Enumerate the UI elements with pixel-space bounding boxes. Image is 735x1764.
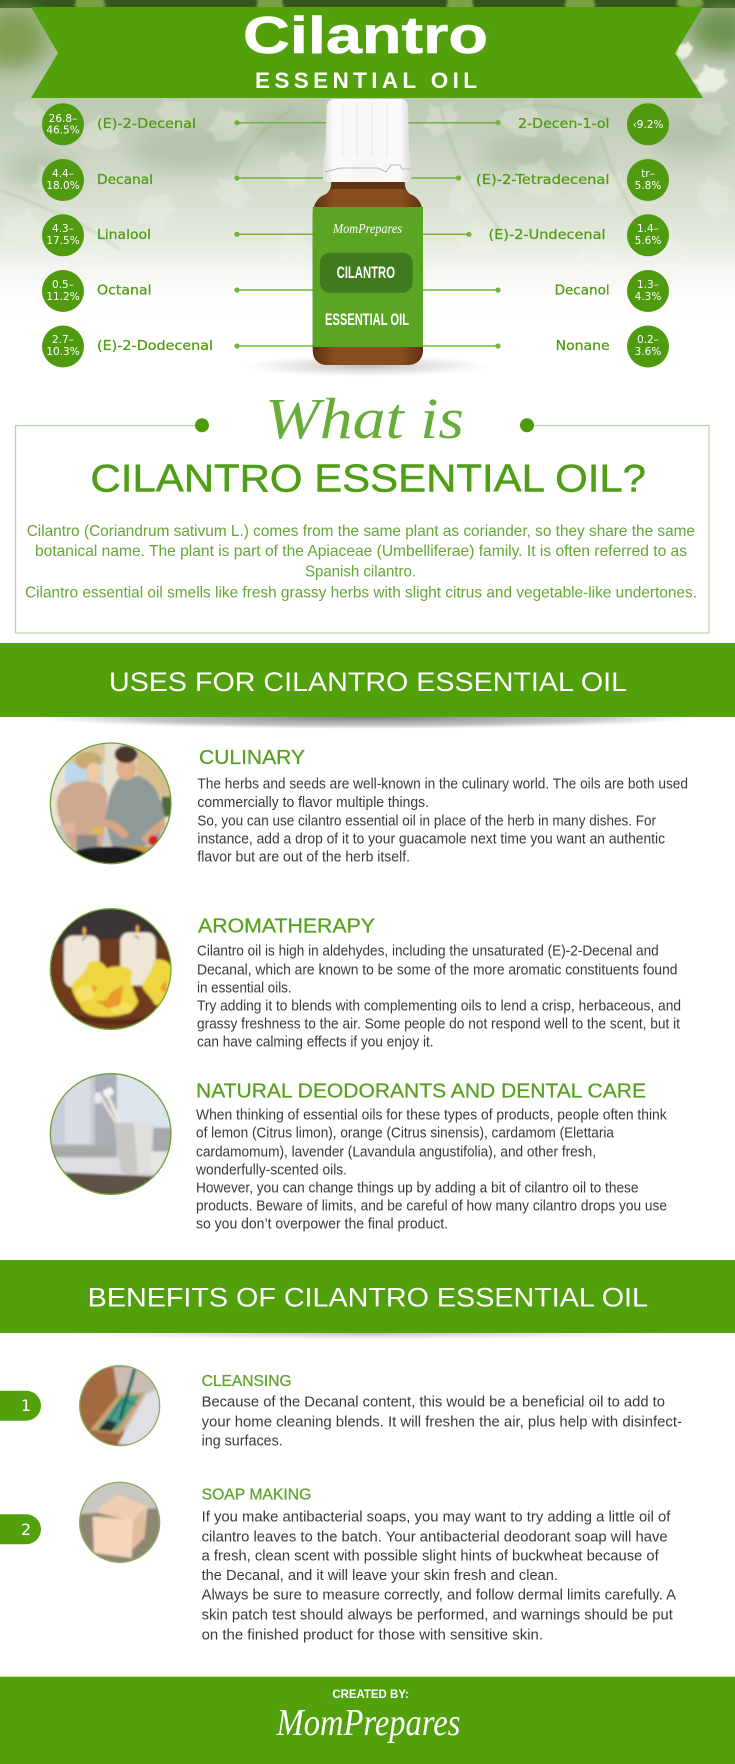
band: uses: USES FOR CILANTRO ESSENTIAL OIL xyxy=(109,667,627,697)
text block: soap making: the Decanal, and it will leave your skin fresh and clean. xyxy=(202,1567,558,1584)
text block: culinary: CULINARY xyxy=(199,747,305,769)
text block: culinary: instance, add a drop of it to your guacamole next time you want an authentic xyxy=(197,831,665,847)
text block: culinary: commercially to flavor multiple things. xyxy=(197,795,429,811)
left compound list: 2.7– xyxy=(52,334,74,346)
left compound list: 18.0% xyxy=(46,180,80,192)
text block: culinary: So, you can use cilantro essential oil in place of the herb in many dishes. For xyxy=(197,814,656,830)
banner ribbon xyxy=(31,7,703,98)
number tab 1 xyxy=(0,1391,41,1421)
left compound list: Octanal xyxy=(97,282,152,298)
text block: deodorants and dental care: When thinking of essential oils for these types of products, people often think xyxy=(196,1107,667,1123)
text block: culinary: flavor but are out of the herb itself. xyxy=(197,849,410,865)
description paragraph: Spanish cilantro. xyxy=(305,564,416,581)
subtitle: Essential Oil: ESSENTIAL OIL xyxy=(255,68,477,93)
left compound list: Linalool xyxy=(97,227,151,243)
description paragraph: Cilantro essential oil smells like fresh grassy herbs with slight citrus and vegetable-like undertones. xyxy=(25,584,697,601)
photo: mop on wooden floor xyxy=(79,1365,160,1446)
text block: cleansing: Because of the Decanal content, this would be a beneficial oil to add to xyxy=(202,1393,665,1410)
text block: aromatherapy: grassy freshness to the air. Some people do not respond well to the scent, but it xyxy=(197,1017,680,1033)
text block: aromatherapy: AROMATHERAPY xyxy=(198,916,375,938)
connector lines xyxy=(234,120,501,349)
photo: soap bars xyxy=(79,1482,160,1563)
main heading: CILANTRO ESSENTIAL OIL? xyxy=(90,458,646,501)
text block: deodorants and dental care: so you don’t overpower the final product. xyxy=(196,1216,448,1232)
text block: soap making xyxy=(202,1486,676,1643)
left compound list: 46.5% xyxy=(46,124,80,136)
left compound list: 4.3– xyxy=(52,223,74,235)
text block: aromatherapy: can have calming effects if you enjoy it. xyxy=(197,1035,434,1051)
photo: toothbrushes in cup xyxy=(50,1073,172,1195)
right compound list: Nonane xyxy=(556,338,610,354)
right compound list: 4.3% xyxy=(635,291,661,303)
text block: soap making: If you make antibacterial soaps, you may want to try adding a little oil of xyxy=(202,1509,671,1526)
text block: soap making: a fresh, clean scent with possible slight hints of buckwheat because of xyxy=(202,1548,660,1565)
text block: deodorants and dental care xyxy=(195,1081,667,1232)
text block: soap making: skin patch test should always be performed, and warnings should be put xyxy=(202,1606,674,1623)
band: uses xyxy=(0,643,735,729)
text block: deodorants and dental care: of lemon (Citrus limon), orange (Citrus sinensis), cardamom (Elettaria xyxy=(196,1125,615,1141)
left compound list: (E)-2-Decenal xyxy=(97,116,196,132)
right compound list xyxy=(476,103,669,368)
footer xyxy=(0,1677,735,1764)
text block: deodorants and dental care: However, you can change things up by adding a bit of cilantro oil to these xyxy=(196,1180,638,1196)
left compound list: Decanal xyxy=(97,172,153,188)
left compound list: (E)-2-Dodecenal xyxy=(97,338,213,354)
text block: soap making: cilantro leaves to the batch. Your antibacterial deodorant soap will have xyxy=(202,1529,668,1546)
text block: aromatherapy: Cilantro oil is high in aldehydes, including the unsaturated (E)-2-Decenal and xyxy=(197,943,659,959)
description paragraph: Cilantro (Coriandrum sativum L.) comes from the same plant as coriander, so they share the same xyxy=(27,523,695,540)
number tab 2 xyxy=(0,1514,41,1544)
background: cilantro leaves photo xyxy=(0,0,735,375)
right compound list: tr– xyxy=(641,168,655,180)
bottle label type: ESSENTIAL OIL xyxy=(325,310,409,329)
bottle label name: CILANTRO xyxy=(337,263,395,282)
bottle xyxy=(242,99,492,377)
text block: deodorants and dental care: cardamomum), lavender (Lavandula angustifolia), and other fresh, xyxy=(196,1144,596,1160)
text block: soap making: Always be sure to measure correctly, and follow dermal limits carefully. A xyxy=(202,1586,676,1603)
text block: deodorants and dental care: wonderfully-scented oils. xyxy=(195,1162,347,1178)
text block: deodorants and dental care: products. Beware of limits, and be careful of how many cilantro drops you use xyxy=(196,1198,667,1214)
text block: aromatherapy: in essential oils. xyxy=(197,981,292,997)
text block: soap making: on the finished product for those with sensitive skin. xyxy=(202,1626,543,1643)
left compound list: 26.8– xyxy=(49,113,77,125)
band: benefits xyxy=(0,1260,735,1340)
text block: culinary: The herbs and seeds are well-known in the culinary world. The oils are both used xyxy=(197,776,688,792)
number tab 2: 2 xyxy=(21,1520,31,1539)
text block: aromatherapy: Try adding it to blends with complementing oils to lend a crisp, herbaceous, and xyxy=(197,999,681,1015)
text block: cleansing: CLEANSING xyxy=(202,1373,292,1390)
left compound list: 10.3% xyxy=(46,346,80,358)
right compound list: 5.8% xyxy=(635,180,661,192)
right compound list: 1.4– xyxy=(637,223,659,235)
title: Cilantro: Cilantro xyxy=(243,7,488,65)
footer: created by: CREATED BY: xyxy=(332,1687,409,1701)
description paragraph xyxy=(25,523,697,601)
left compound list: 17.5% xyxy=(46,235,80,247)
left compound list: 11.2% xyxy=(46,291,80,303)
photo: couple cooking xyxy=(50,742,172,864)
text block: aromatherapy xyxy=(197,916,681,1051)
description paragraph: botanical name. The plant is part of the Apiaceae (Umbelliferae) family. It is often referred to as xyxy=(35,543,687,560)
left compound list: 0.5– xyxy=(52,279,74,291)
script heading: What is xyxy=(265,386,464,451)
text block: cleansing: ing surfaces. xyxy=(202,1433,283,1450)
right compound list: 1.3– xyxy=(637,279,659,291)
text block: culinary xyxy=(197,747,688,865)
right compound list: 5.6% xyxy=(635,235,661,247)
band: benefits: BENEFITS OF CILANTRO ESSENTIAL OIL xyxy=(88,1283,648,1313)
text block: cleansing xyxy=(202,1373,682,1450)
panel: what is xyxy=(16,386,709,633)
right compound list: 0.2– xyxy=(637,334,659,346)
text block: aromatherapy: Decanal, which are known to be some of the more aromatic constituents found xyxy=(197,962,678,978)
right compound list: 2-Decen-1-ol xyxy=(518,116,610,132)
right compound list: Decanol xyxy=(555,282,610,298)
text block: soap making: SOAP MAKING xyxy=(202,1486,311,1503)
text block: deodorants and dental care: NATURAL DEODORANTS AND DENTAL CARE xyxy=(196,1081,646,1103)
top edge of leaves xyxy=(0,0,735,8)
text block: cleansing: your home cleaning blends. It will freshen the air, plus help with disinfect- xyxy=(202,1413,682,1430)
right compound list: (E)-2-Tetradecenal xyxy=(476,172,610,188)
photo: candles and flowers xyxy=(50,908,172,1030)
right compound list: 3.6% xyxy=(635,346,661,358)
right compound list: ‹9.2% xyxy=(633,119,663,131)
bottle label brand: MomPrepares xyxy=(332,222,402,237)
left compound list: 4.4– xyxy=(52,168,74,180)
number tab 1: 1 xyxy=(21,1396,31,1415)
right compound list: (E)-2-Undecenal xyxy=(488,227,606,243)
left compound list xyxy=(42,103,213,368)
footer: brand name: MomPrepares xyxy=(276,1702,460,1744)
